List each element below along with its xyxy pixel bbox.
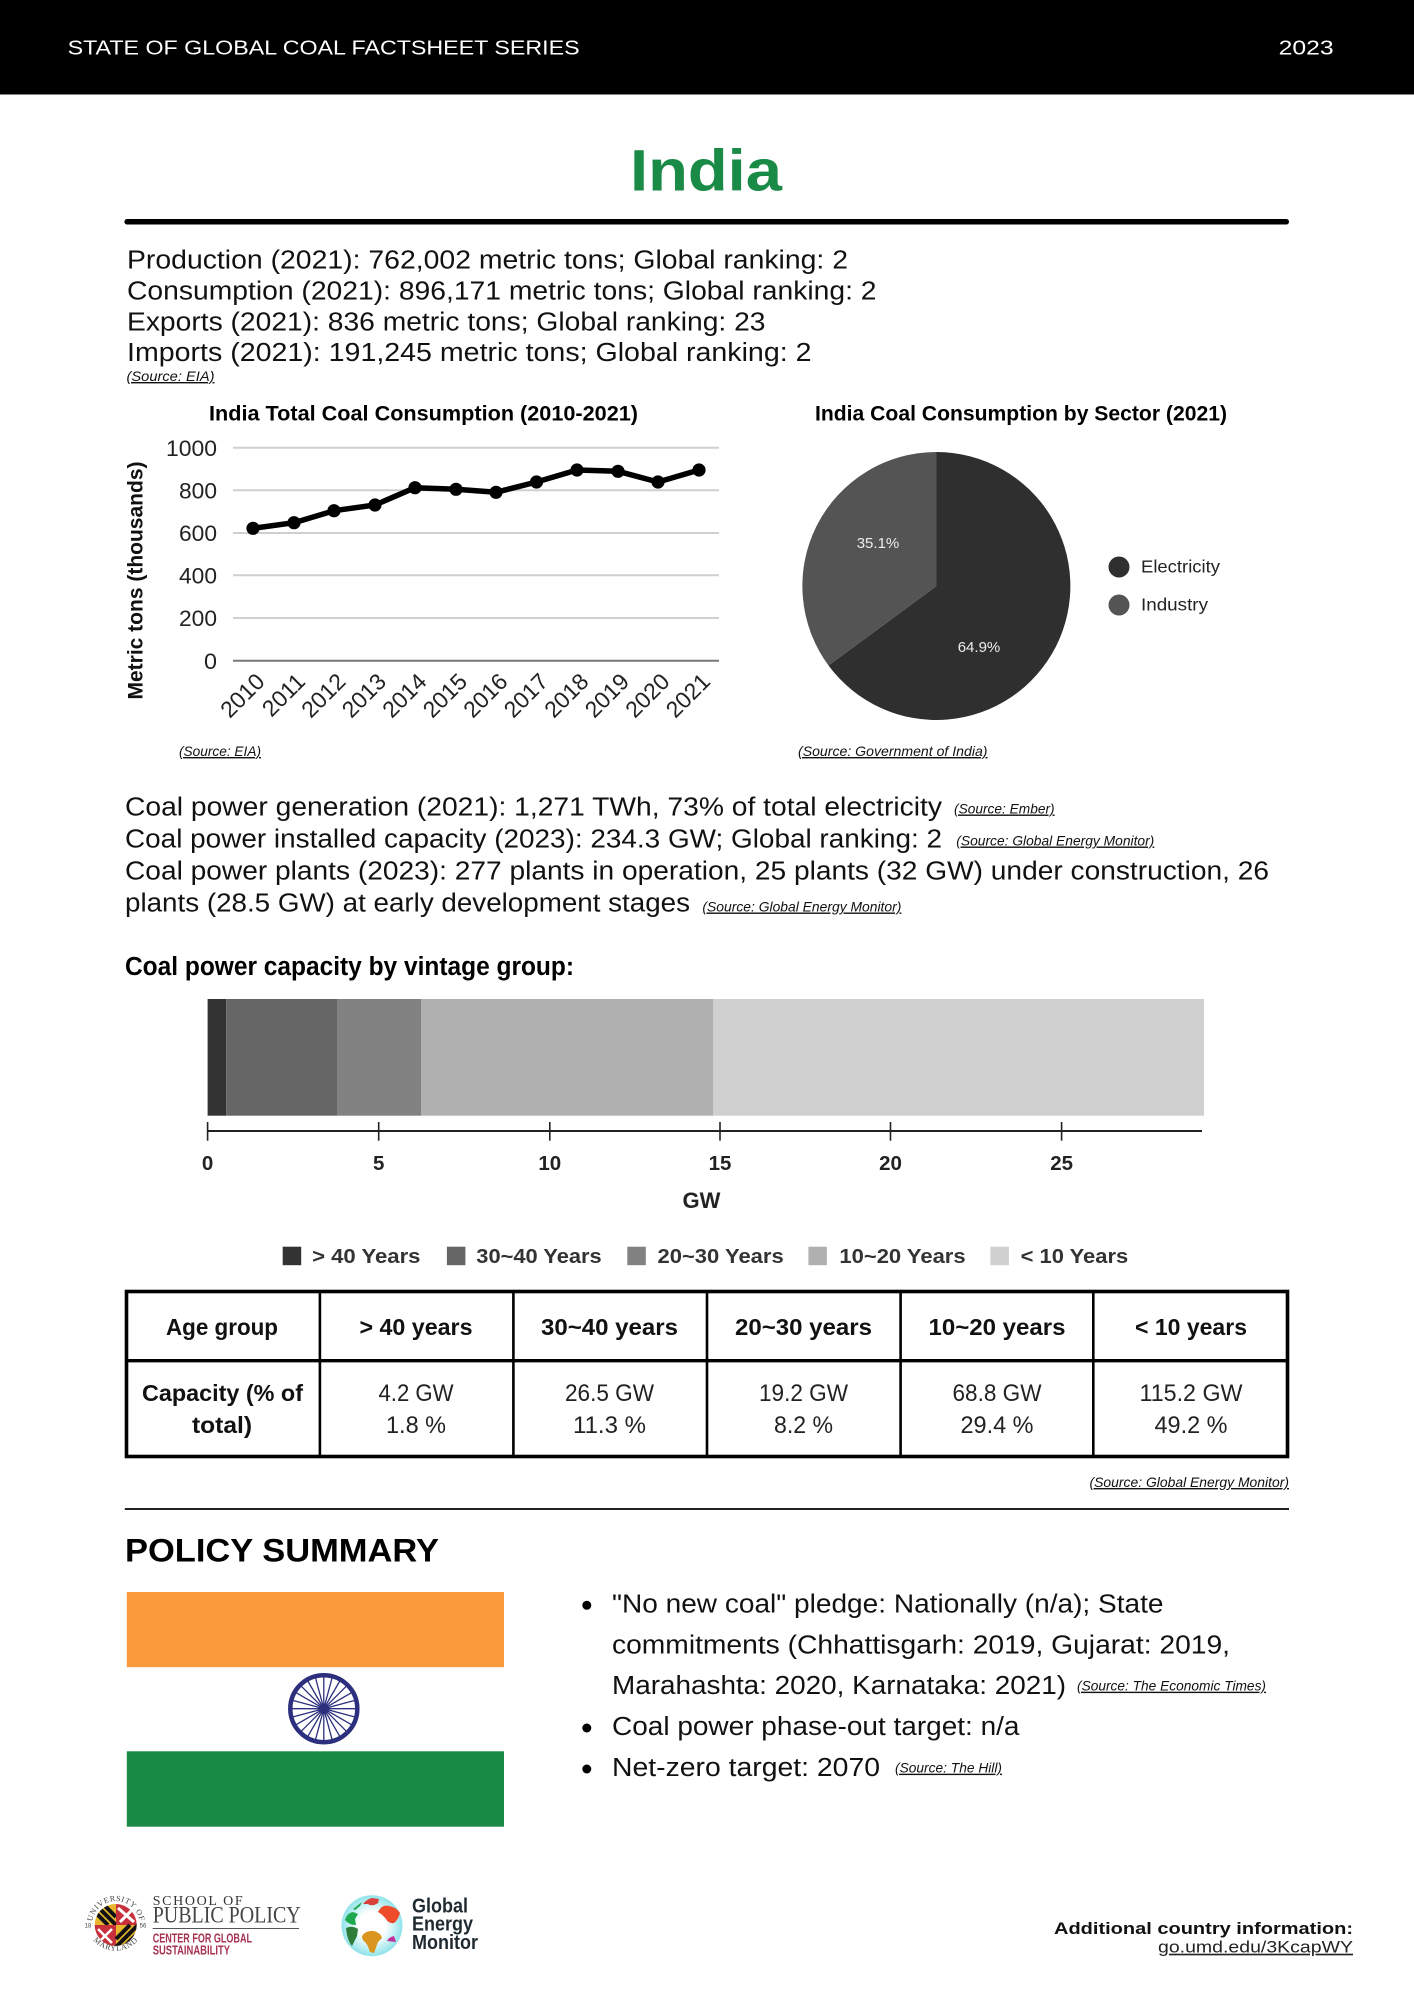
policy bullet list: "No new coal" pledge: Nationally (n/a); State (612, 1591, 1164, 1619)
logo: Global Energy Monitor (342, 1895, 478, 1956)
logo: Global Energy Monitor: Global (412, 1896, 468, 1918)
capacity table: 1.8 % (386, 1412, 446, 1439)
coal power text block: Coal power installed capacity (2023): 234.3 GW; Global ranking: 2 (125, 826, 942, 854)
bar chart legend: 10~20 Years (839, 1245, 966, 1268)
line chart: total coal consumption: 2016 (458, 668, 513, 723)
logo: University of Maryland School of Public Policy: SCHOOL OF (153, 1894, 243, 1909)
bar chart legend: 30~40 Years (476, 1245, 602, 1268)
pie chart: coal consumption by sector: (Source: Government of India) (798, 743, 988, 759)
coal statistics text block: Production (2021): 762,002 metric tons; Global ranking: 2 (127, 246, 848, 274)
policy bullet list: Net-zero target: 2070 (612, 1754, 880, 1782)
logo: Global Energy Monitor: Energy (412, 1914, 474, 1936)
bar chart legend (283, 1245, 1128, 1268)
title: India (630, 139, 783, 204)
line chart: total coal consumption: 2017 (498, 668, 553, 723)
coal power text block: (Source: Ember) (954, 800, 1055, 816)
line chart: total coal consumption: 2018 (539, 668, 594, 723)
line chart: total coal consumption: 2019 (579, 668, 634, 723)
line chart: total coal consumption: 1000 (166, 436, 217, 461)
line chart: total coal consumption: 2012 (296, 668, 351, 723)
header band (0, 0, 1414, 94)
bar chart legend: 20~30 Years (658, 1245, 784, 1268)
policy bullet list: Coal power phase-out target: n/a (612, 1713, 1020, 1741)
line chart: total coal consumption: 600 (179, 521, 217, 546)
capacity table: total) (192, 1412, 252, 1438)
line chart: total coal consumption: 800 (179, 478, 217, 504)
line chart: total coal consumption: 2010 (215, 668, 270, 723)
capacity table: 68.8 GW (952, 1380, 1042, 1407)
capacity table: 8.2 % (774, 1412, 833, 1439)
line chart: total coal consumption: 2020 (620, 668, 675, 723)
capacity table: 10~20 years (928, 1314, 1066, 1340)
additional country information: Additional country information: (1054, 1920, 1353, 1938)
coal power text block: Coal power plants (2023): 277 plants in operation, 25 plants (32 GW) under construction, 26 (125, 858, 1269, 886)
stacked bar chart: capacity by vintage: 25 (1050, 1152, 1073, 1175)
pie chart: coal consumption by sector: 35.1% (857, 535, 899, 552)
line chart: total coal consumption: India Total Coal Consumption (2010-2021) (209, 402, 638, 426)
additional country information: go.umd.edu/3KcapWY (1158, 1939, 1353, 1957)
pie chart: coal consumption by sector (798, 402, 1227, 759)
capacity table: Capacity (% of (142, 1380, 303, 1406)
capacity table: 4.2 GW (378, 1380, 454, 1407)
coal power text block (125, 794, 1269, 918)
coal power text block: Coal power generation (2021): 1,271 TWh, 73% of total electricity (125, 794, 942, 822)
coal power text block: plants (28.5 GW) at early development stages (125, 890, 690, 918)
line chart: total coal consumption: 200 (179, 606, 217, 631)
coal statistics text block (126, 246, 876, 384)
coal statistics text block: Consumption (2021): 896,171 metric tons; Global ranking: 2 (127, 278, 876, 306)
capacity table (126, 1291, 1288, 1457)
coal statistics text block: (Source: EIA) (126, 368, 214, 384)
coal power text block: (Source: Global Energy Monitor) (702, 898, 901, 914)
line chart: total coal consumption: 2015 (417, 668, 472, 723)
line chart: total coal consumption: 2013 (336, 668, 391, 723)
pie chart: coal consumption by sector: India Coal Consumption by Sector (2021) (815, 402, 1227, 426)
logo: University of Maryland School of Public Policy: PUBLIC POLICY (153, 1903, 301, 1928)
coal statistics text block: Imports (2021): 191,245 metric tons; Global ranking: 2 (127, 339, 812, 367)
capacity table: 115.2 GW (1140, 1380, 1243, 1407)
coal power text block: (Source: Global Energy Monitor) (956, 832, 1154, 848)
logo: University of Maryland School of Public Policy: SUSTAINABILITY (153, 1944, 230, 1958)
stacked bar chart: capacity by vintage: 20 (879, 1152, 902, 1175)
pie chart: coal consumption by sector: Electricity (1141, 556, 1220, 576)
stacked bar chart: capacity by vintage: 15 (709, 1152, 731, 1175)
logo: University of Maryland School of Public Policy: MARYLAND (93, 1936, 137, 1951)
line chart: total coal consumption: Metric tons (thousands) (124, 462, 148, 700)
vintage group heading: Coal power capacity by vintage group: (125, 953, 574, 981)
logo: University of Maryland School of Public Policy (85, 1894, 301, 1958)
line chart: total coal consumption: 2021 (660, 668, 715, 723)
bar chart legend: > 40 Years (312, 1245, 420, 1268)
capacity table: 19.2 GW (759, 1380, 848, 1407)
logo: University of Maryland School of Public Policy: 18 (85, 1924, 92, 1930)
stacked bar chart: capacity by vintage: 5 (373, 1152, 384, 1175)
capacity table: 20~30 years (735, 1314, 872, 1340)
policy bullet list: (Source: The Economic Times) (1077, 1678, 1266, 1694)
capacity table: 29.4 % (960, 1412, 1034, 1439)
pie chart: coal consumption by sector: Industry (1141, 594, 1208, 614)
pie chart: coal consumption by sector: 64.9% (958, 639, 1000, 656)
line chart: total coal consumption (124, 402, 719, 759)
capacity table: 11.3 % (573, 1412, 646, 1439)
capacity table: 26.5 GW (565, 1380, 654, 1407)
capacity table: < 10 years (1135, 1314, 1247, 1340)
coal statistics text block: Exports (2021): 836 metric tons; Global ranking: 23 (127, 308, 766, 336)
stacked bar chart: capacity by vintage: 0 (202, 1152, 213, 1175)
header band: 2023 (1279, 36, 1334, 60)
table source: (Source: Global Energy Monitor) (1090, 1474, 1289, 1490)
line chart: total coal consumption: 400 (179, 564, 217, 588)
additional country information (1054, 1920, 1353, 1957)
header band: STATE OF GLOBAL COAL FACTSHEET SERIES (68, 36, 580, 60)
title rule (124, 219, 1289, 224)
logo: University of Maryland School of Public Policy: 56 (140, 1924, 147, 1930)
policy bullet list: Marahashta: 2020, Karnataka: 2021) (612, 1672, 1066, 1700)
logo: University of Maryland School of Public Policy: CENTER FOR GLOBAL (153, 1932, 252, 1946)
icon: flag of India (127, 1592, 504, 1827)
capacity table: > 40 years (360, 1314, 472, 1340)
bar chart legend: < 10 Years (1021, 1245, 1128, 1268)
capacity table: 49.2 % (1154, 1412, 1228, 1439)
stacked bar chart: capacity by vintage (202, 999, 1204, 1213)
policy divider (125, 1508, 1289, 1510)
line chart: total coal consumption: 2011 (257, 668, 310, 722)
logo: University of Maryland School of Public Policy: UNIVERSITY OF (87, 1896, 145, 1920)
line chart: total coal consumption: 2014 (377, 668, 432, 723)
policy bullet list (582, 1591, 1266, 1782)
capacity table: 30~40 years (541, 1314, 678, 1340)
capacity table: Age group (166, 1314, 278, 1340)
policy bullet list: (Source: The Hill) (895, 1760, 1002, 1776)
policy summary heading: POLICY SUMMARY (125, 1533, 439, 1569)
policy bullet list: commitments (Chhattisgarh: 2019, Gujarat: 2019, (612, 1631, 1230, 1659)
stacked bar chart: capacity by vintage: 10 (538, 1152, 561, 1175)
line chart: total coal consumption: (Source: EIA) (179, 743, 261, 759)
logo: Global Energy Monitor: Monitor (412, 1932, 478, 1954)
stacked bar chart: capacity by vintage: GW (683, 1188, 721, 1213)
line chart: total coal consumption: 0 (204, 649, 217, 674)
